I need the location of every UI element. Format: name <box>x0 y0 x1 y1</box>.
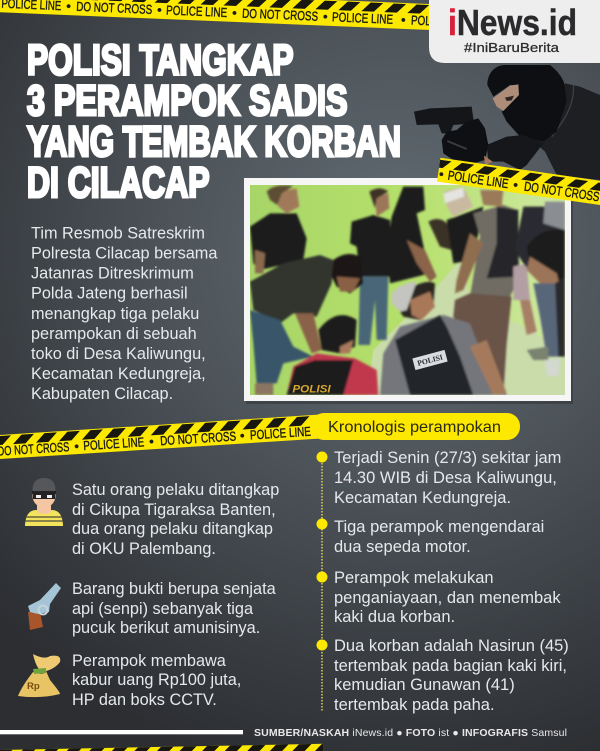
middle police tape: DO NOT CROSS <box>160 428 237 448</box>
intro text <box>31 224 218 403</box>
icon: revolver <box>28 583 61 630</box>
left list item 3: HP dan boks CCTV. <box>72 691 217 709</box>
middle police tape: POLICE LINE <box>83 434 145 453</box>
top police tape: • <box>401 12 406 27</box>
middle police tape <box>0 415 321 460</box>
intro text: Polda Jateng berhasil <box>31 284 188 302</box>
bottom police tape <box>0 744 323 751</box>
timeline item 3 <box>334 569 561 626</box>
timeline item 4 <box>334 637 569 714</box>
title <box>27 36 401 207</box>
timeline item 3: penganiayaan, dan menembak <box>334 589 561 607</box>
left list item 3: kabur uang Rp100 juta, <box>72 671 241 689</box>
timeline item 3: Perampok melakukan <box>334 569 494 587</box>
left list item 1: di Cikupa Tigaraksa Banten, <box>72 501 276 519</box>
middle police tape: • <box>74 438 80 454</box>
top police tape: • <box>323 9 328 24</box>
footer credits: SUMBER/NASKAH iNews.id ● FOTO ist ● INFOGRAFIS Samsul <box>254 727 567 739</box>
timeline item 1: Kecamatan Kedungreja. <box>334 489 511 507</box>
top police tape: • <box>232 5 237 20</box>
left list item 2 <box>72 580 277 637</box>
logo panel <box>429 0 600 63</box>
logo hashtag: #IniBaruBerita <box>464 41 559 55</box>
intro text: Jatanras Ditreskrimum <box>31 264 194 282</box>
icon: robber <box>25 478 63 526</box>
timeline item 3: kaki dua korban. <box>334 608 455 626</box>
photo: police with arrested suspects: POLISI <box>292 383 332 395</box>
heading pill: kronologis: Kronologis perampokan <box>328 419 501 436</box>
timeline item 2 <box>334 518 544 556</box>
right police tape: POLICE LINE <box>447 168 510 191</box>
right police tape <box>437 158 600 207</box>
photo: police with arrested suspects <box>250 185 565 395</box>
intro text: Polresta Cilacap bersama <box>31 244 218 262</box>
timeline item 4: Dua korban adalah Nasirun (45) <box>334 637 569 655</box>
left list item 2: api (senpi) sebanyak tiga <box>72 600 254 618</box>
title: YANG TEMBAK KORBAN <box>27 118 401 166</box>
photo: police with arrested suspects: POLISI <box>416 352 444 368</box>
title: POLISI TANGKAP <box>27 36 294 84</box>
title: DI CILACAP <box>27 159 210 207</box>
left list item 3: Perampok membawa <box>72 652 227 670</box>
top police tape: DO NOT CROSS <box>242 6 319 24</box>
middle police tape: DO NOT CROSS <box>0 439 70 459</box>
top police tape: POLICE LINE <box>166 2 228 20</box>
right police tape: • <box>512 177 519 193</box>
title: 3 PERAMPOK SADIS <box>27 77 348 125</box>
intro text: perampokan di sebuah <box>31 325 197 343</box>
intro text: menangkap tiga pelaku <box>31 305 199 323</box>
top police tape: POLICE LINE <box>411 13 473 30</box>
robber figure with gun <box>414 65 600 180</box>
middle police tape: • <box>149 434 155 449</box>
timeline item 1 <box>334 449 561 507</box>
middle police tape: • <box>240 428 245 443</box>
top police tape: POLICE LINE <box>332 9 394 27</box>
timeline item 1: Terjadi Senin (27/3) sekitar jam <box>334 449 561 467</box>
intro text: Tim Resmob Satreskrim <box>31 224 205 242</box>
intro text: Kabupaten Cilacap. <box>31 385 173 403</box>
timeline line and bullets <box>316 452 328 711</box>
timeline item 4: kemudian Gunawan (41) <box>334 676 515 694</box>
left list item 1: di OKU Palembang. <box>72 540 216 558</box>
left list item 3 <box>72 652 241 709</box>
logo wordmark: iNews.id <box>448 2 577 43</box>
left list item 2: Barang bukti berupa senjata <box>72 580 277 598</box>
left list item 1 <box>72 481 279 558</box>
heading pill: kronologis <box>311 413 520 440</box>
middle police tape: POLICE LINE <box>250 424 312 443</box>
timeline item 1: 14.30 WIB di Desa Kaliwungu, <box>334 469 557 487</box>
left list item 2: pucuk berikut amunisinya. <box>72 619 260 637</box>
intro text: toko di Desa Kaliwungu, <box>31 345 206 363</box>
intro text: Kecamatan Kedungreja, <box>31 365 206 383</box>
icon: money bag <box>18 654 60 697</box>
timeline item 2: dua sepeda motor. <box>334 538 471 556</box>
left list item 1: dua orang pelaku ditangkap <box>72 520 273 538</box>
left list item 1: Satu orang pelaku ditangkap <box>72 481 279 499</box>
timeline item 2: Tiga perampok mengendarai <box>334 518 544 536</box>
top police tape: • <box>157 2 163 17</box>
right police tape: • <box>438 166 445 182</box>
photo frame <box>244 178 573 404</box>
timeline item 4: tertembak pada bagian kaki kiri, <box>334 657 567 675</box>
footer rule <box>0 730 243 734</box>
icon: money bag: Rp <box>27 681 40 692</box>
timeline item 4: tertembak pada paha. <box>334 696 495 714</box>
top police tape <box>0 0 473 32</box>
